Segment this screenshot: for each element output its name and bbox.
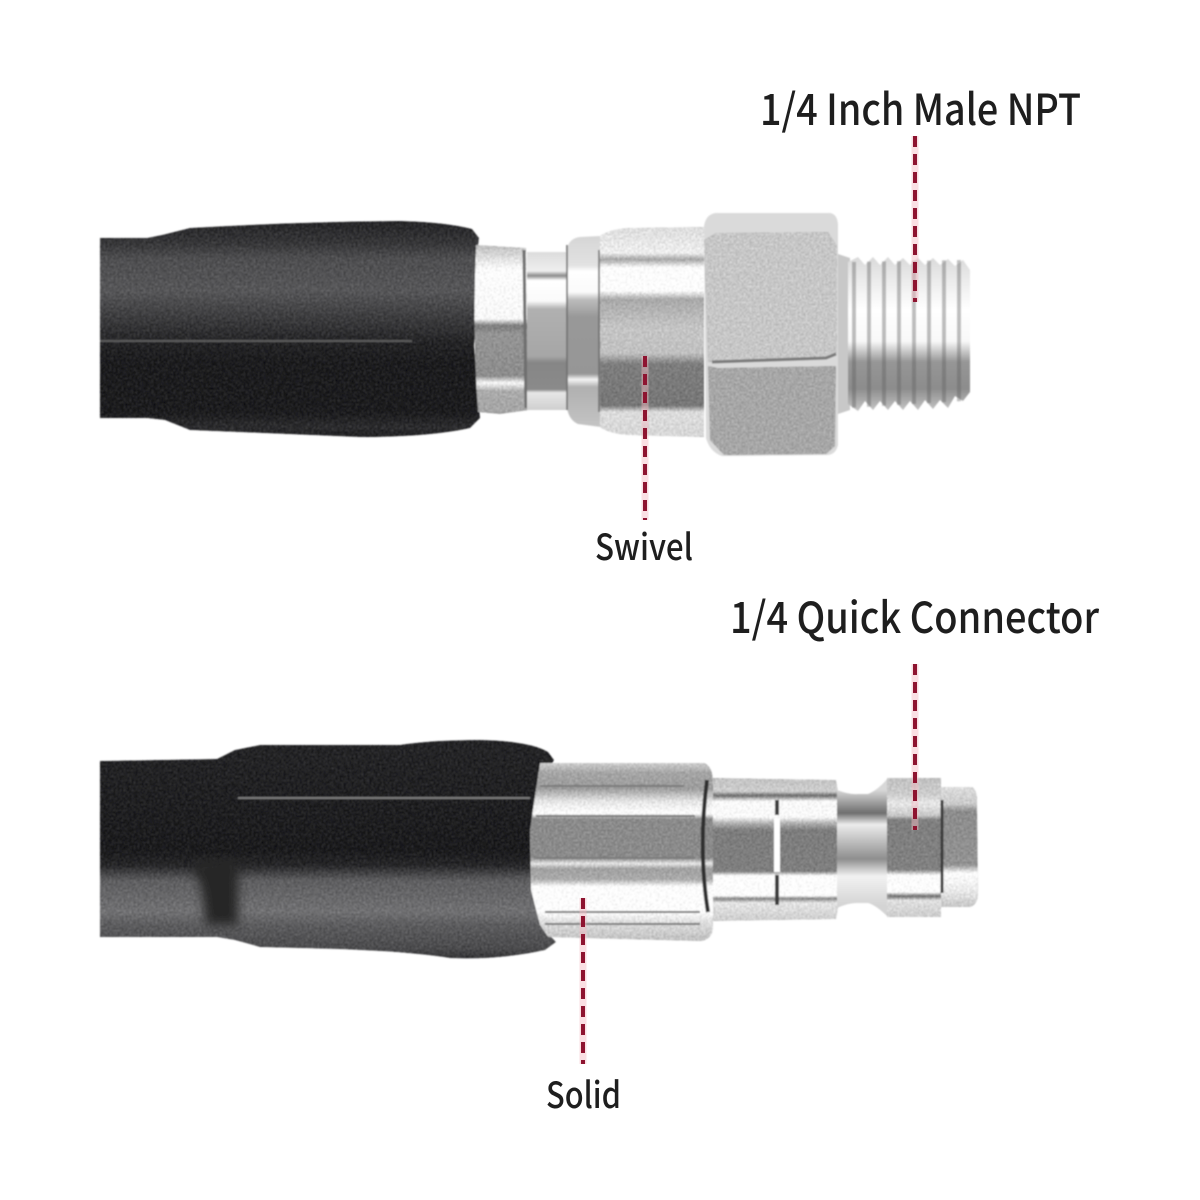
top hose body [100,221,480,437]
top hose assembly [100,213,970,456]
label: 1/4 Quick Connector: 1/4 Quick Connector [730,584,1099,646]
sleeve crease [192,858,238,925]
bottom hose body [100,740,556,958]
plug neck [837,778,888,917]
hex upper face [704,232,837,362]
ferrule chamfer lines [567,245,599,412]
ferrule ring [567,236,601,427]
top collar edge line [524,250,526,408]
plug body [713,778,838,921]
male thread [848,257,970,411]
collar shoulder shadow [703,780,708,912]
top neck [527,252,568,410]
top sleeve seam [100,340,412,342]
plug end shadow [940,800,944,893]
leader line: quick connector [912,664,918,830]
hex edge line [712,354,836,362]
leader line: NPT [912,136,918,302]
plug groove [775,800,779,905]
collar flute lines [536,786,700,924]
leader line: solid [580,898,586,1064]
plug tip [887,778,941,917]
hex lower face [708,366,836,455]
label: 1/4 Inch Male NPT: 1/4 Inch Male NPT [760,76,1081,138]
swivel sleeve [600,227,704,437]
plug end [941,787,978,907]
top crimp collar [474,245,529,414]
thread base [838,254,850,414]
thread shading stripes [848,260,970,408]
label: Solid: Solid [546,1067,621,1119]
hex nut [704,213,838,456]
bottom hose assembly [100,740,978,958]
solid collar [530,763,713,941]
bottom sleeve seam [238,797,530,799]
leader line: swivel [642,356,648,520]
label: Swivel: Swivel [595,519,693,571]
